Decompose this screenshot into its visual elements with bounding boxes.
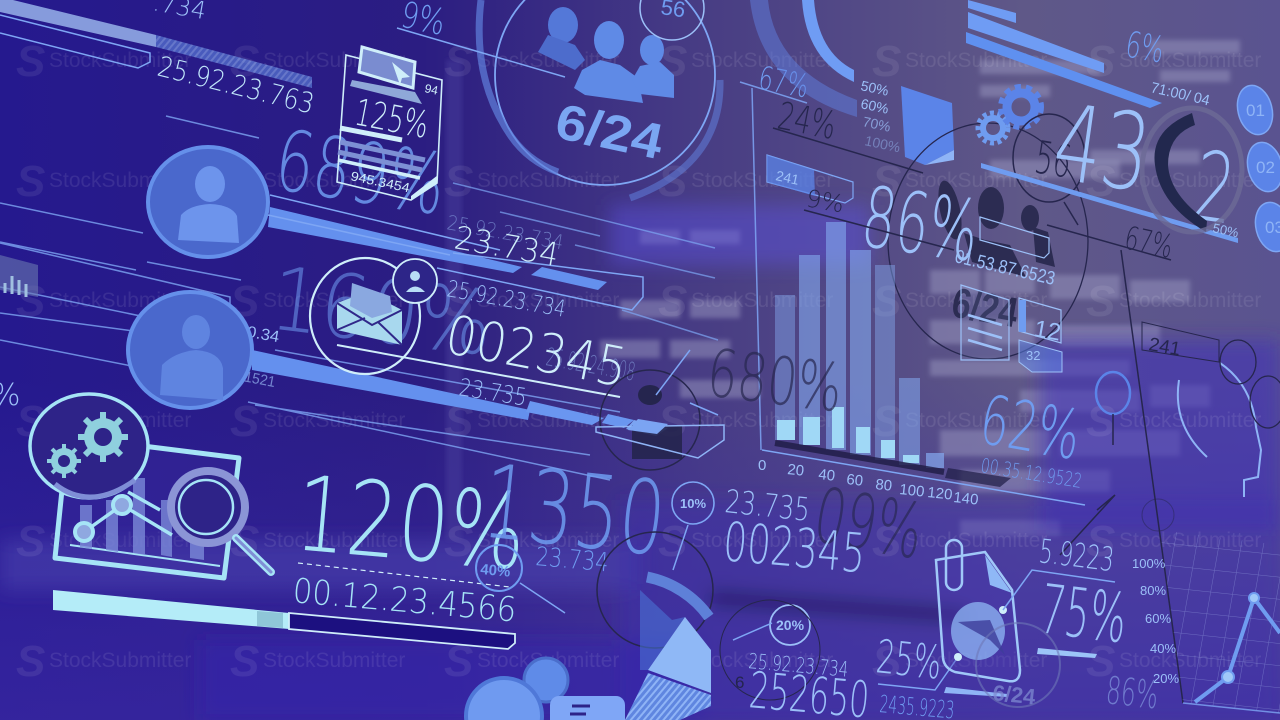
numbered badges 01 02 03: 01	[1246, 101, 1265, 120]
watermarks: StockSubmitter	[691, 49, 833, 72]
stat: 10 percent with 23.735 and 002345: 002345	[721, 510, 868, 585]
stripes: upper right	[966, 0, 1162, 108]
bar chart with axis: 0	[758, 457, 766, 474]
watermarks: StockSubmitter	[691, 169, 833, 192]
watermarks: StockSubmitter	[1119, 169, 1261, 192]
watermarks: StockSubmitter	[905, 289, 1047, 312]
icon: head profile: 241	[1147, 334, 1182, 360]
stat group: upper right: 50%	[859, 77, 890, 99]
stat: 62 percent: 00.35.12.9522	[979, 453, 1084, 493]
progress bar	[53, 590, 515, 649]
stat: 62 percent: 62%	[974, 381, 1086, 476]
watermarks: StockSubmitter	[905, 409, 1047, 432]
watermarks: StockSubmitter	[477, 49, 619, 72]
watermarks: S	[230, 517, 259, 566]
watermarks: StockSubmitter	[691, 409, 833, 432]
watermarks: StockSubmitter	[905, 529, 1047, 552]
watermarks: StockSubmitter	[905, 649, 1047, 672]
icon: blue gears with lens and stat 543: 2	[1187, 130, 1242, 246]
numbered badges 01 02 03	[1232, 82, 1280, 255]
stat group: upper right: 32	[1026, 348, 1040, 363]
icon: document with laptop and 125 percent	[337, 47, 442, 200]
watermarks: S	[444, 37, 473, 86]
stat: 62 percent	[974, 372, 1130, 555]
watermarks: S	[230, 637, 259, 686]
watermarks: S	[16, 277, 45, 326]
watermarks: StockSubmitter	[49, 409, 191, 432]
stat group: upper right: 86%	[856, 168, 985, 281]
icon: clipped document with pie	[936, 540, 1115, 681]
watermarks: StockSubmitter	[263, 649, 405, 672]
watermarks: S	[872, 157, 901, 206]
bar chart with axis: 100	[899, 481, 925, 501]
line chart on grid	[1132, 499, 1280, 713]
watermarks: S	[658, 37, 687, 86]
icon: document with laptop and 125 percent: 945.3454	[349, 168, 411, 195]
readouts: center numbers	[337, 210, 638, 412]
line chart on grid: 60%	[1145, 611, 1171, 626]
watermarks: S	[16, 37, 45, 86]
stat group: upper right: 67%	[755, 59, 812, 105]
watermarks: StockSubmitter	[1119, 529, 1261, 552]
icon: target people circle left of clock	[596, 334, 846, 470]
stat: 5.9223 and 75 percent: 5.9223	[1037, 531, 1116, 579]
stat group: upper right	[740, 0, 1088, 450]
watermarks: StockSubmitter	[263, 529, 405, 552]
watermarks: S	[444, 637, 473, 686]
readouts: center numbers: 25.92.23.734	[445, 276, 568, 323]
watermarks: S	[872, 637, 901, 686]
panel: top-left bars and readout: 01.64.52.1521	[185, 357, 277, 391]
watermarks: StockSubmitter	[1119, 409, 1261, 432]
line chart on grid: 100%	[1132, 556, 1166, 571]
icon: person circle 2	[128, 292, 252, 408]
stat group: upper right: 100%	[863, 132, 902, 155]
icon: top people group 6/24	[397, 0, 720, 198]
icon: bottom chat bubbles	[466, 658, 625, 720]
stat: 5.9223 and 75 percent: 75%	[1036, 570, 1131, 659]
icon: document with laptop and 125 percent: 125%	[351, 91, 432, 147]
watermarks: S	[1086, 37, 1115, 86]
stat: 20 percent with readouts: 25%	[874, 629, 944, 690]
watermarks: S	[230, 157, 259, 206]
watermarks: S	[658, 397, 687, 446]
stat: 5.9223 and 75 percent	[976, 531, 1160, 717]
watermarks: S	[1086, 157, 1115, 206]
watermarks: S	[658, 637, 687, 686]
stat: 20 percent with readouts: 6	[735, 673, 744, 692]
icon: blue gears with lens and stat 543: 43	[1047, 81, 1158, 216]
watermarks: StockSubmitter	[691, 289, 833, 312]
numbered badges 01 02 03: 02	[1256, 158, 1275, 177]
watermarks: StockSubmitter	[905, 169, 1047, 192]
watermarks: S	[1086, 277, 1115, 326]
stat group: upper right: 01.53.87.6523	[953, 246, 1057, 290]
watermarks: S	[230, 397, 259, 446]
icon: document with laptop and 125 percent: 94	[423, 81, 440, 98]
stat group: upper right: 60%	[859, 95, 890, 117]
watermarks: S	[1086, 517, 1115, 566]
bar chart with axis: 80	[875, 476, 893, 495]
stat: 20 percent with readouts: 25.92.23.734	[748, 649, 849, 682]
watermarks: S	[16, 397, 45, 446]
watermarks: S	[872, 397, 901, 446]
watermarks: StockSubmitter	[477, 529, 619, 552]
watermarks: S	[444, 397, 473, 446]
icon: person circle 1	[148, 147, 268, 257]
watermarks: StockSubmitter	[477, 409, 619, 432]
icon: blue gears with lens and stat 543: 50%	[1211, 220, 1240, 240]
panel: top-left bars and readout: 689%	[269, 111, 452, 234]
headline stat 120 percent: 120%	[291, 452, 531, 594]
watermarks: S	[658, 517, 687, 566]
watermarks: S	[1086, 637, 1115, 686]
pie chart segment	[625, 577, 711, 720]
panel: top-left bars and readout: 25.92.23.763	[154, 50, 318, 120]
watermarks: StockSubmitter	[263, 409, 405, 432]
watermarks: StockSubmitter	[49, 649, 191, 672]
watermarks: StockSubmitter	[691, 529, 833, 552]
stat: 10 percent with 23.735 and 002345	[672, 470, 930, 585]
stat: 1350 and 40 percent: 1350	[477, 443, 671, 580]
icon: target people circle left of clock: 680%	[703, 334, 846, 427]
watermarks: StockSubmitter	[263, 289, 405, 312]
line chart on grid: 40%	[1150, 641, 1176, 656]
watermarks: StockSubmitter	[905, 49, 1047, 72]
watermarks: StockSubmitter	[691, 649, 833, 672]
watermarks: StockSubmitter	[477, 649, 619, 672]
readouts: center numbers: 23.734	[452, 218, 562, 274]
line chart on grid: 20%	[1153, 671, 1179, 686]
watermarks: StockSubmitter	[49, 289, 191, 312]
watermarks: S	[230, 277, 259, 326]
icon: envelope with user badge	[310, 258, 437, 374]
watermarks: S	[16, 157, 45, 206]
watermarks: StockSubmitter	[49, 49, 191, 72]
headline stat 120 percent: 00.12.23.4566	[291, 571, 518, 630]
icon: blue gears with lens and stat 543: 6%	[1122, 24, 1167, 71]
watermarks: StockSubmitter	[263, 169, 405, 192]
stat group: upper right: 6/24	[948, 279, 1022, 336]
watermarks: S	[444, 277, 473, 326]
stat: 1350 and 40 percent: 40%	[480, 561, 511, 581]
watermarks: StockSubmitter	[477, 169, 619, 192]
panel: top-left bars and readout: 20.34	[236, 322, 281, 346]
watermarks: S	[872, 277, 901, 326]
stat group: upper right: 9%	[804, 184, 846, 219]
stat: 1350 and 40 percent	[476, 443, 713, 648]
readouts: center numbers: 002345	[441, 303, 632, 400]
bar chart with axis: 60	[846, 471, 864, 490]
panel: top-left bars and readout	[0, 0, 498, 413]
watermarks: S	[658, 157, 687, 206]
stat: 20 percent with readouts	[720, 600, 1007, 720]
stat: 5.9223 and 75 percent: 86%	[1104, 668, 1160, 717]
watermarks: S	[230, 37, 259, 86]
icon: blue gears with lens and stat 543	[978, 24, 1242, 266]
icon: top people group 6/24: 6/24	[551, 93, 668, 170]
watermarks: S	[444, 517, 473, 566]
watermarks: StockSubmitter	[1119, 649, 1261, 672]
stat: 10 percent with 23.735 and 002345: 10%	[680, 496, 706, 511]
panel: top-left bars and readout: 160%	[265, 247, 498, 376]
icon: gears in circle and chart with magnifier	[30, 394, 271, 578]
watermarks: S	[1086, 397, 1115, 446]
stat group: upper right: 24%	[774, 94, 840, 148]
watermarks: S	[872, 517, 901, 566]
watermarks: StockSubmitter	[49, 529, 191, 552]
watermarks: S	[444, 157, 473, 206]
line chart on grid: 80%	[1140, 583, 1166, 598]
readouts: center numbers: 25.92.23.734	[445, 210, 566, 254]
icon: blue gears with lens and stat 543: 56	[1031, 131, 1075, 188]
watermarks: S	[658, 277, 687, 326]
stat group: upper right: 12	[1032, 315, 1063, 347]
icon: left bar chart fragment	[0, 255, 38, 297]
bar chart with axis: 40	[818, 466, 836, 485]
stat: 10 percent with 23.735 and 002345: 23.735	[723, 482, 812, 529]
stat: 1350 and 40 percent: 23.734	[534, 542, 610, 578]
bar chart with axis: 120	[927, 484, 953, 504]
icon: head profile	[1121, 250, 1280, 703]
bar chart with axis: 20	[787, 461, 805, 480]
watermarks: StockSubmitter	[1119, 49, 1261, 72]
stat group: upper right: 241	[774, 167, 801, 188]
readouts: center numbers: 25.92.24.908	[544, 342, 638, 387]
watermarks: StockSubmitter	[263, 49, 405, 72]
bar: person 1 connector	[268, 183, 718, 340]
bar: person 2 connector	[248, 350, 668, 480]
stat: 20 percent with readouts: 20%	[776, 617, 805, 633]
watermarks: S	[872, 37, 901, 86]
bar chart with axis	[758, 222, 1085, 509]
watermarks: S	[16, 637, 45, 686]
stat group: upper right: 70%	[861, 113, 892, 135]
stat: 5.9223 and 75 percent: 6/24	[991, 680, 1037, 710]
readouts: center numbers: 23.735	[457, 373, 529, 412]
icon: blue gears with lens and stat 543: 67%	[1121, 219, 1176, 266]
watermarks: StockSubmitter	[49, 169, 191, 192]
bar chart with axis: 140	[953, 489, 979, 509]
stat: 10 percent with 23.735 and 002345: 09%	[808, 470, 930, 576]
watermarks: StockSubmitter	[1119, 289, 1261, 312]
watermarks: StockSubmitter	[477, 289, 619, 312]
icon: blue gears with lens and stat 543: 71:00/ 04	[1149, 79, 1211, 109]
watermarks: S	[16, 517, 45, 566]
headline stat 120 percent	[291, 452, 531, 630]
